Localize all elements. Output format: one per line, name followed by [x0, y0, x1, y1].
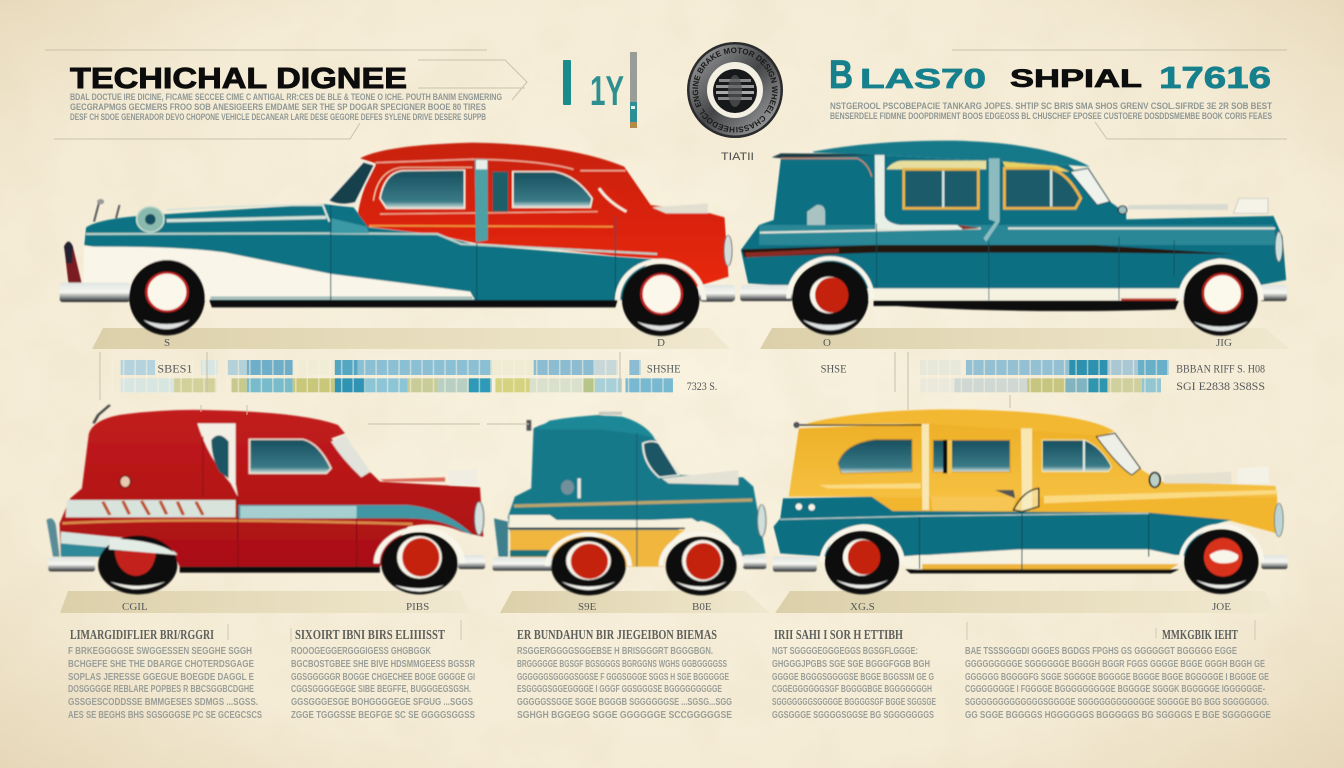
chrome belt lines	[760, 228, 1275, 233]
hood details	[380, 477, 445, 482]
centre marks: teal bar, numerals and pencil: 1Y	[590, 67, 624, 114]
bumpers	[740, 285, 793, 301]
text column 3: BRGGGGGE BGSGF BGSGGGS BGRGGNS WGHS GGBGGGGSS	[517, 659, 727, 670]
car 3: red van and small teal truck	[47, 405, 766, 595]
wheel spec labels: S9E	[578, 601, 597, 613]
cream rear panel	[83, 247, 475, 299]
intro text right: NSTGEROOL PSCOBEPACIE TANKARG JOPES. SHTIP SC BRIS SMA SHOS GRENV CSOL.SIFRDE 3E 2R SOB BEST	[830, 101, 1272, 112]
rocker	[900, 549, 1182, 570]
teal body	[84, 204, 655, 301]
strip labels: 7323 S.	[687, 380, 717, 393]
door seams	[920, 513, 1149, 570]
arches	[822, 526, 1262, 563]
text column 4: NGT SGGGGEGGGEGGS BGSGFLGGGE:	[772, 646, 918, 657]
rocker panel	[864, 287, 1184, 300]
text column 4: GGSGGGE SGGGGSGGSE BG SGGGGGGGS	[772, 710, 934, 721]
strip row 2	[121, 378, 673, 392]
header right: title block	[829, 50, 1287, 139]
rocker	[209, 300, 618, 307]
text column 1: SOPLAS JERESSE GGEGUE BOEGDE DAGGL E	[68, 672, 254, 683]
title left: TECHICHAL DIGNEE	[70, 63, 407, 95]
wheel spec labels: O	[823, 337, 831, 349]
wheel spec labels	[122, 337, 1232, 613]
truck wheels	[551, 537, 737, 595]
emblem caption: TIATII	[721, 151, 754, 163]
wing and hood scoop	[599, 187, 651, 212]
column 4 heading: IRII SAHI I SOR H ETTIBH	[774, 628, 903, 643]
strip row 1	[121, 360, 641, 375]
silver belt stripe	[66, 500, 236, 517]
intro text left: DESF CH SDOE GENERADOR DEVO CHOPONE VEHICLE DECANEAR LARE DESE GEGORE DEFES SYLENE DRIVE DESERE SUPPB	[70, 112, 486, 123]
window 2	[933, 440, 1010, 472]
yellow upper body	[789, 423, 1277, 497]
orange spear	[62, 520, 412, 524]
windshield	[1096, 433, 1140, 475]
window 1	[838, 439, 912, 473]
van body	[60, 410, 483, 567]
door handle	[1014, 488, 1039, 512]
top roof band	[536, 416, 655, 438]
sill	[180, 567, 380, 573]
car 4: yellow and teal wagon	[773, 409, 1288, 594]
text column 4: GHGGGJPGBS SGE SGE BGGGFGGB BGH	[772, 659, 930, 670]
yellow lower panel	[510, 530, 685, 567]
dots	[795, 503, 802, 510]
icon: pencil	[630, 52, 637, 128]
strip labels: SHSHE	[647, 362, 681, 375]
window 3	[1042, 440, 1112, 472]
cream band	[509, 515, 743, 557]
centre marks: teal bar, numerals and pencil	[563, 52, 637, 128]
tail trim	[94, 405, 110, 423]
wheel spec labels: XG.S	[850, 601, 875, 613]
front arch	[377, 529, 462, 563]
windshield	[331, 435, 371, 477]
strip labels	[157, 362, 847, 393]
truck body	[508, 415, 765, 557]
small teal truck	[493, 412, 766, 595]
column divider ticks	[228, 620, 1255, 642]
bumpers	[60, 283, 130, 302]
right cell separators	[916, 358, 1169, 393]
text column 3	[517, 628, 732, 721]
centre pillar	[475, 159, 488, 242]
text column 2: CGGSGGGGEGGE SIBE BEGFFE, BUGGGEGSGSH.	[291, 684, 471, 695]
car 2: teal wagon	[740, 141, 1287, 336]
bumpers	[48, 557, 95, 571]
windshield	[328, 162, 375, 205]
right strip row 2	[920, 378, 1161, 392]
red cabin and hood	[358, 143, 728, 287]
column 5 heading: MMKGBIK IEHT	[1162, 628, 1238, 643]
hood parts	[1128, 204, 1228, 210]
text column 2: GGSGGGESGE BOHGGGGEGE SFGUG ...SGGS	[291, 697, 473, 708]
text column 4	[772, 628, 936, 721]
text column 3: GGGGGGSGGGGSGGSE F GGGSGGGE SGGS H SGE BGGGGGE	[517, 672, 729, 683]
wheels	[129, 260, 699, 336]
text: SHSE	[821, 362, 847, 375]
door handle	[959, 225, 981, 229]
truck ball and rod	[561, 480, 574, 495]
roof highlight lines	[376, 159, 626, 171]
fin slashes	[103, 501, 203, 515]
rear panel lighter belt	[759, 225, 1277, 245]
cell separators	[90, 358, 687, 393]
truck window	[643, 441, 679, 477]
wheel spec labels: CGIL	[122, 601, 148, 613]
colour strip chart right	[916, 358, 1265, 393]
rear fender panel	[61, 532, 177, 557]
title right: B	[829, 53, 853, 97]
wheels	[98, 532, 458, 594]
wheel spec labels: D	[657, 337, 665, 349]
body	[741, 155, 1286, 300]
text column 5: BAE TSSSGGGDI GGGES BGDGS FPGHS GS GGGGGGT BGGGGG EGGE	[965, 646, 1237, 657]
teal trim lines	[86, 233, 657, 254]
header left: title block	[45, 50, 527, 139]
pale highlights on yellow	[819, 483, 1277, 503]
wheel spec labels: JOE	[1212, 601, 1231, 613]
faint guide lines	[100, 352, 1010, 424]
roof	[807, 409, 1115, 435]
title right	[829, 53, 1271, 97]
wheel arches	[789, 258, 1261, 300]
truck arches	[548, 533, 741, 566]
text column 3: SGHGH BGGEGG SGGE GGGGGGE SCCGGGGGSE	[517, 710, 732, 721]
text column 1: BCHGEFE SHE THE DBARGE CHOTERDSGAGE	[68, 659, 254, 670]
wheels	[792, 262, 1258, 336]
dark side spear	[742, 245, 1235, 257]
door seams	[876, 223, 1174, 300]
strip labels: SBES1	[157, 362, 193, 375]
text column 3: GGGGGSSGGE SGGE BGGGB SGGGGGGSE ...SGSG...SGG	[517, 697, 732, 708]
windshield	[1070, 168, 1110, 205]
ground shadows	[60, 328, 1290, 613]
text column 2: ROOOGEGGERGGGIGESS GHGBGGK	[291, 646, 432, 657]
wheels	[825, 529, 1259, 594]
wheel spec labels: B0E	[692, 601, 712, 613]
hood part	[662, 470, 738, 485]
pillars	[875, 155, 963, 229]
teal lower body	[774, 497, 1232, 557]
truck stripe	[514, 500, 752, 506]
white pillar	[197, 423, 238, 497]
intro text left	[70, 92, 502, 123]
text column 1: F BRKEGGGGSE SWGGESSEN SEGGHE SGGH	[68, 646, 252, 657]
text column 4: CGGEGGGGGGSGF BGGGGBGE BGGGGGGGH	[772, 684, 932, 695]
text column 4: SGGGGGGGSGGGGE BGGGGSGF BGGE SGGSGE	[772, 697, 936, 708]
intro text left: GECGRAPMGS GECMERS FROO SOB ANESIGEERS EMDAME SER THE SP DOGAR SPECIGNER BOOE 80 TIRES	[70, 102, 486, 113]
text column 2: BGCBOSTGBEE SHE BIVE HDSMMGEESS BGSSR	[291, 659, 476, 670]
text column 1: AES SE BEGHS BHS SGSGGGSE PC SE GCEGCSCS	[68, 710, 262, 721]
column 1 heading: LIMARGIDIFLIER BRI/RGGRI	[70, 628, 214, 643]
text column 2: ZGGE TGGGSSE BEGFGE SC SE GGGGSGGSS	[291, 710, 475, 721]
trim line	[780, 513, 1149, 519]
truck bumpers	[493, 557, 553, 571]
text column 1	[68, 628, 262, 721]
title right: SHPIAL	[1010, 65, 1142, 93]
window 2 with yellow frame	[1003, 162, 1070, 172]
rear quarter window line	[781, 158, 872, 177]
front wheel arch trim	[618, 261, 704, 300]
rear spotlight	[137, 207, 164, 232]
text column 4: GGGGE BGGGSGGGGSE BGGE BGGSSM GE G	[772, 672, 934, 683]
window 1 with yellow frame	[886, 161, 986, 169]
wheel spec labels: S	[164, 337, 170, 349]
text column 3: ESGGGGSGGEGGGGE I GGGF GGSGGGSE BGGGGGGGGGE	[517, 684, 722, 695]
rear tail fin and antenna	[64, 199, 120, 283]
roof	[813, 141, 1090, 167]
window	[250, 439, 331, 473]
icon: round emblem	[687, 42, 783, 163]
column 3 heading: ER BUNDAHUN BIR JIEGEIBON BIEMAS	[517, 628, 717, 643]
text column 5	[965, 628, 1271, 721]
red van	[47, 405, 485, 594]
intro text right	[830, 101, 1272, 122]
right strip labels	[1176, 362, 1265, 393]
colour strip chart left	[90, 358, 847, 393]
wheel spec labels: PIBS	[406, 601, 429, 613]
roof rail	[772, 153, 875, 158]
text column 3: RSGGERGGGGSGGEBSE H BRISGGGRT BGGGBGN.	[517, 646, 713, 657]
text column 1: GSSGESCODDSSE BMMGESES SDMGS ...SGSS.	[68, 697, 258, 708]
door seam	[203, 437, 357, 570]
intro text left: BDAL DOCTUE IRE DICINE, FICAME SECCEE CIME C ANTIGAL RR:CES DE BLE & TEONE O ICHE. POUTH BANIM ENGMERING	[70, 92, 502, 103]
text column 2	[291, 628, 476, 721]
text column 5: GG SGGE BGGGGS HGGGGGGS BGGGGGS BG SGGGGS E BGE SGGGGGGE	[965, 710, 1271, 721]
bumpers	[773, 557, 817, 572]
title right: LAS70	[860, 63, 986, 94]
title right: 17616	[1159, 60, 1271, 95]
windows	[380, 170, 464, 208]
text column 2: GGSGGGGGR BOGGE CHGECHEE BOGE GGGGE GI	[291, 672, 475, 683]
car 1: red and teal sedan	[60, 143, 735, 336]
door seams	[331, 205, 615, 300]
text column 1: DOSGGGGE REBLARE POPBES R BBCSGGBCDGHE	[68, 684, 254, 695]
wheel spec labels: JIG	[1216, 337, 1232, 349]
hood parts	[1164, 472, 1232, 483]
column 2 heading: SIXOIRT IBNI BIRS ELIIIISST	[295, 628, 445, 643]
right strip row 1	[920, 360, 1169, 375]
